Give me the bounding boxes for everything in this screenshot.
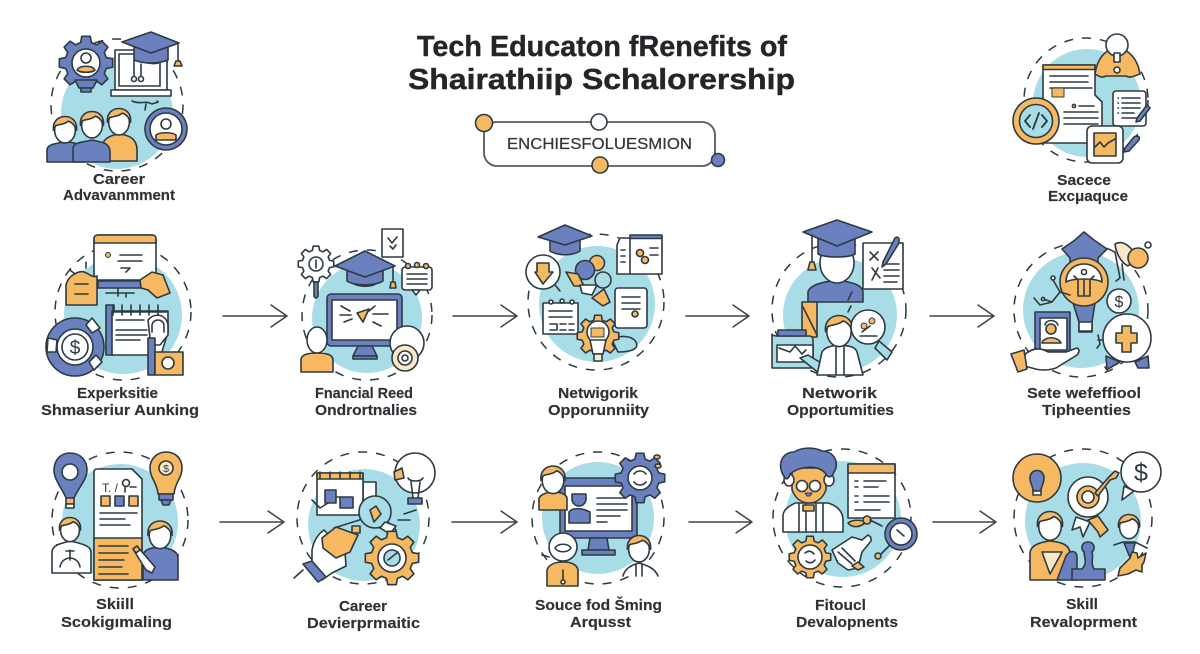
label: Shmaseriur Aunking <box>41 402 199 419</box>
arrow <box>933 511 996 533</box>
label <box>548 385 650 419</box>
label: Devalopnents <box>796 614 898 631</box>
icon: pin, document, bulb and two people: $ <box>163 463 169 475</box>
arrow <box>453 305 517 327</box>
icon: monitor with people and gear <box>532 452 665 586</box>
arrow <box>689 511 752 533</box>
arrow <box>220 511 284 533</box>
icon: arrow, lens, portrait in hand and cross badge: $ <box>1115 294 1124 311</box>
panel: fitoucl developments <box>773 448 917 631</box>
label <box>796 597 898 631</box>
panel: set beneficial tipheenties <box>1011 232 1151 419</box>
arrow <box>686 305 749 327</box>
label <box>63 171 175 204</box>
label: Arqusst <box>570 614 631 631</box>
icon: graduate, notes, chart and magnifier <box>772 220 906 377</box>
panel: network opportunities <box>772 220 906 419</box>
label <box>41 385 199 419</box>
title: Shairathiip Schalorership <box>408 64 795 96</box>
label: Experksitie <box>77 385 158 402</box>
label: Devierprmaitic <box>307 615 420 632</box>
label: Sacece <box>1057 172 1111 189</box>
icon: scholar, checklist, gear, hand and magnifier <box>773 448 917 587</box>
icon: monitor, folder, calendar and coin: $ <box>70 338 81 359</box>
label: Fitoucl <box>815 597 866 614</box>
panel: career development <box>294 452 435 632</box>
panel: financial need <box>298 229 432 419</box>
label: Opporunniity <box>548 402 650 419</box>
label: Fnancial Reed <box>315 385 413 402</box>
label: Scokigımaling <box>61 614 172 631</box>
label: Ondrortnalies <box>315 402 417 419</box>
label: Skiill <box>96 596 134 613</box>
label: Career <box>93 171 145 188</box>
label <box>1027 385 1141 419</box>
icon: network cluster, browser, calendar and bulb <box>526 225 664 370</box>
title <box>408 31 795 96</box>
label: Opportumities <box>787 402 894 419</box>
label: Tipheenties <box>1042 402 1131 419</box>
label: Skill <box>1066 596 1098 613</box>
label <box>787 385 894 419</box>
label: Netwigorik <box>558 385 639 402</box>
label: Souce fod Šming <box>535 596 662 614</box>
label: Excμaquce <box>1048 188 1128 205</box>
panel: source funding <box>532 452 665 631</box>
icon: bulb, target, dollar bubble and people <box>1013 449 1161 587</box>
label <box>307 598 420 632</box>
label: Advavanmment <box>63 187 175 204</box>
label <box>1030 596 1137 631</box>
arrow <box>223 305 287 327</box>
icon: pin, document, bulb and two people <box>52 452 188 588</box>
panel: skill scoking <box>52 452 188 631</box>
title: Tech Educaton fRenefits of <box>417 31 787 63</box>
panel: skill revelopment <box>1013 449 1161 631</box>
label <box>61 596 172 631</box>
icon: planner, bulb, hand, magnifier and gear <box>294 452 435 585</box>
label: Career <box>339 598 387 615</box>
label: Networik <box>802 385 878 402</box>
icon: document, code lens, bulb and chart <box>1013 34 1150 163</box>
label <box>315 385 417 419</box>
panel: career advancement <box>47 32 187 204</box>
label <box>1048 172 1128 205</box>
icon: arrow, lens, portrait in hand and cross badge <box>1011 232 1151 377</box>
arrow <box>452 511 517 533</box>
subtitle badge: ENCHIESFOLUESMION <box>507 136 692 153</box>
panel: expertise <box>41 235 199 419</box>
icon: pin, document, bulb and two people: T. / <box>102 481 119 495</box>
label: Revaloprment <box>1030 614 1137 631</box>
icon: monitor, folder, calendar and coin <box>46 235 191 380</box>
panel: sacece exchange <box>1013 34 1150 205</box>
panel: network opportunity <box>526 225 664 419</box>
icon: team, gear, laptop and graduation cap <box>47 32 187 171</box>
label: Sete wefeffiool <box>1027 385 1141 402</box>
subtitle badge <box>476 114 724 173</box>
icon: monitor with graduation cap and gear <box>298 229 432 380</box>
arrow <box>930 305 994 327</box>
icon: bulb, target, dollar bubble and people: $ <box>1134 459 1148 487</box>
label <box>535 596 662 631</box>
